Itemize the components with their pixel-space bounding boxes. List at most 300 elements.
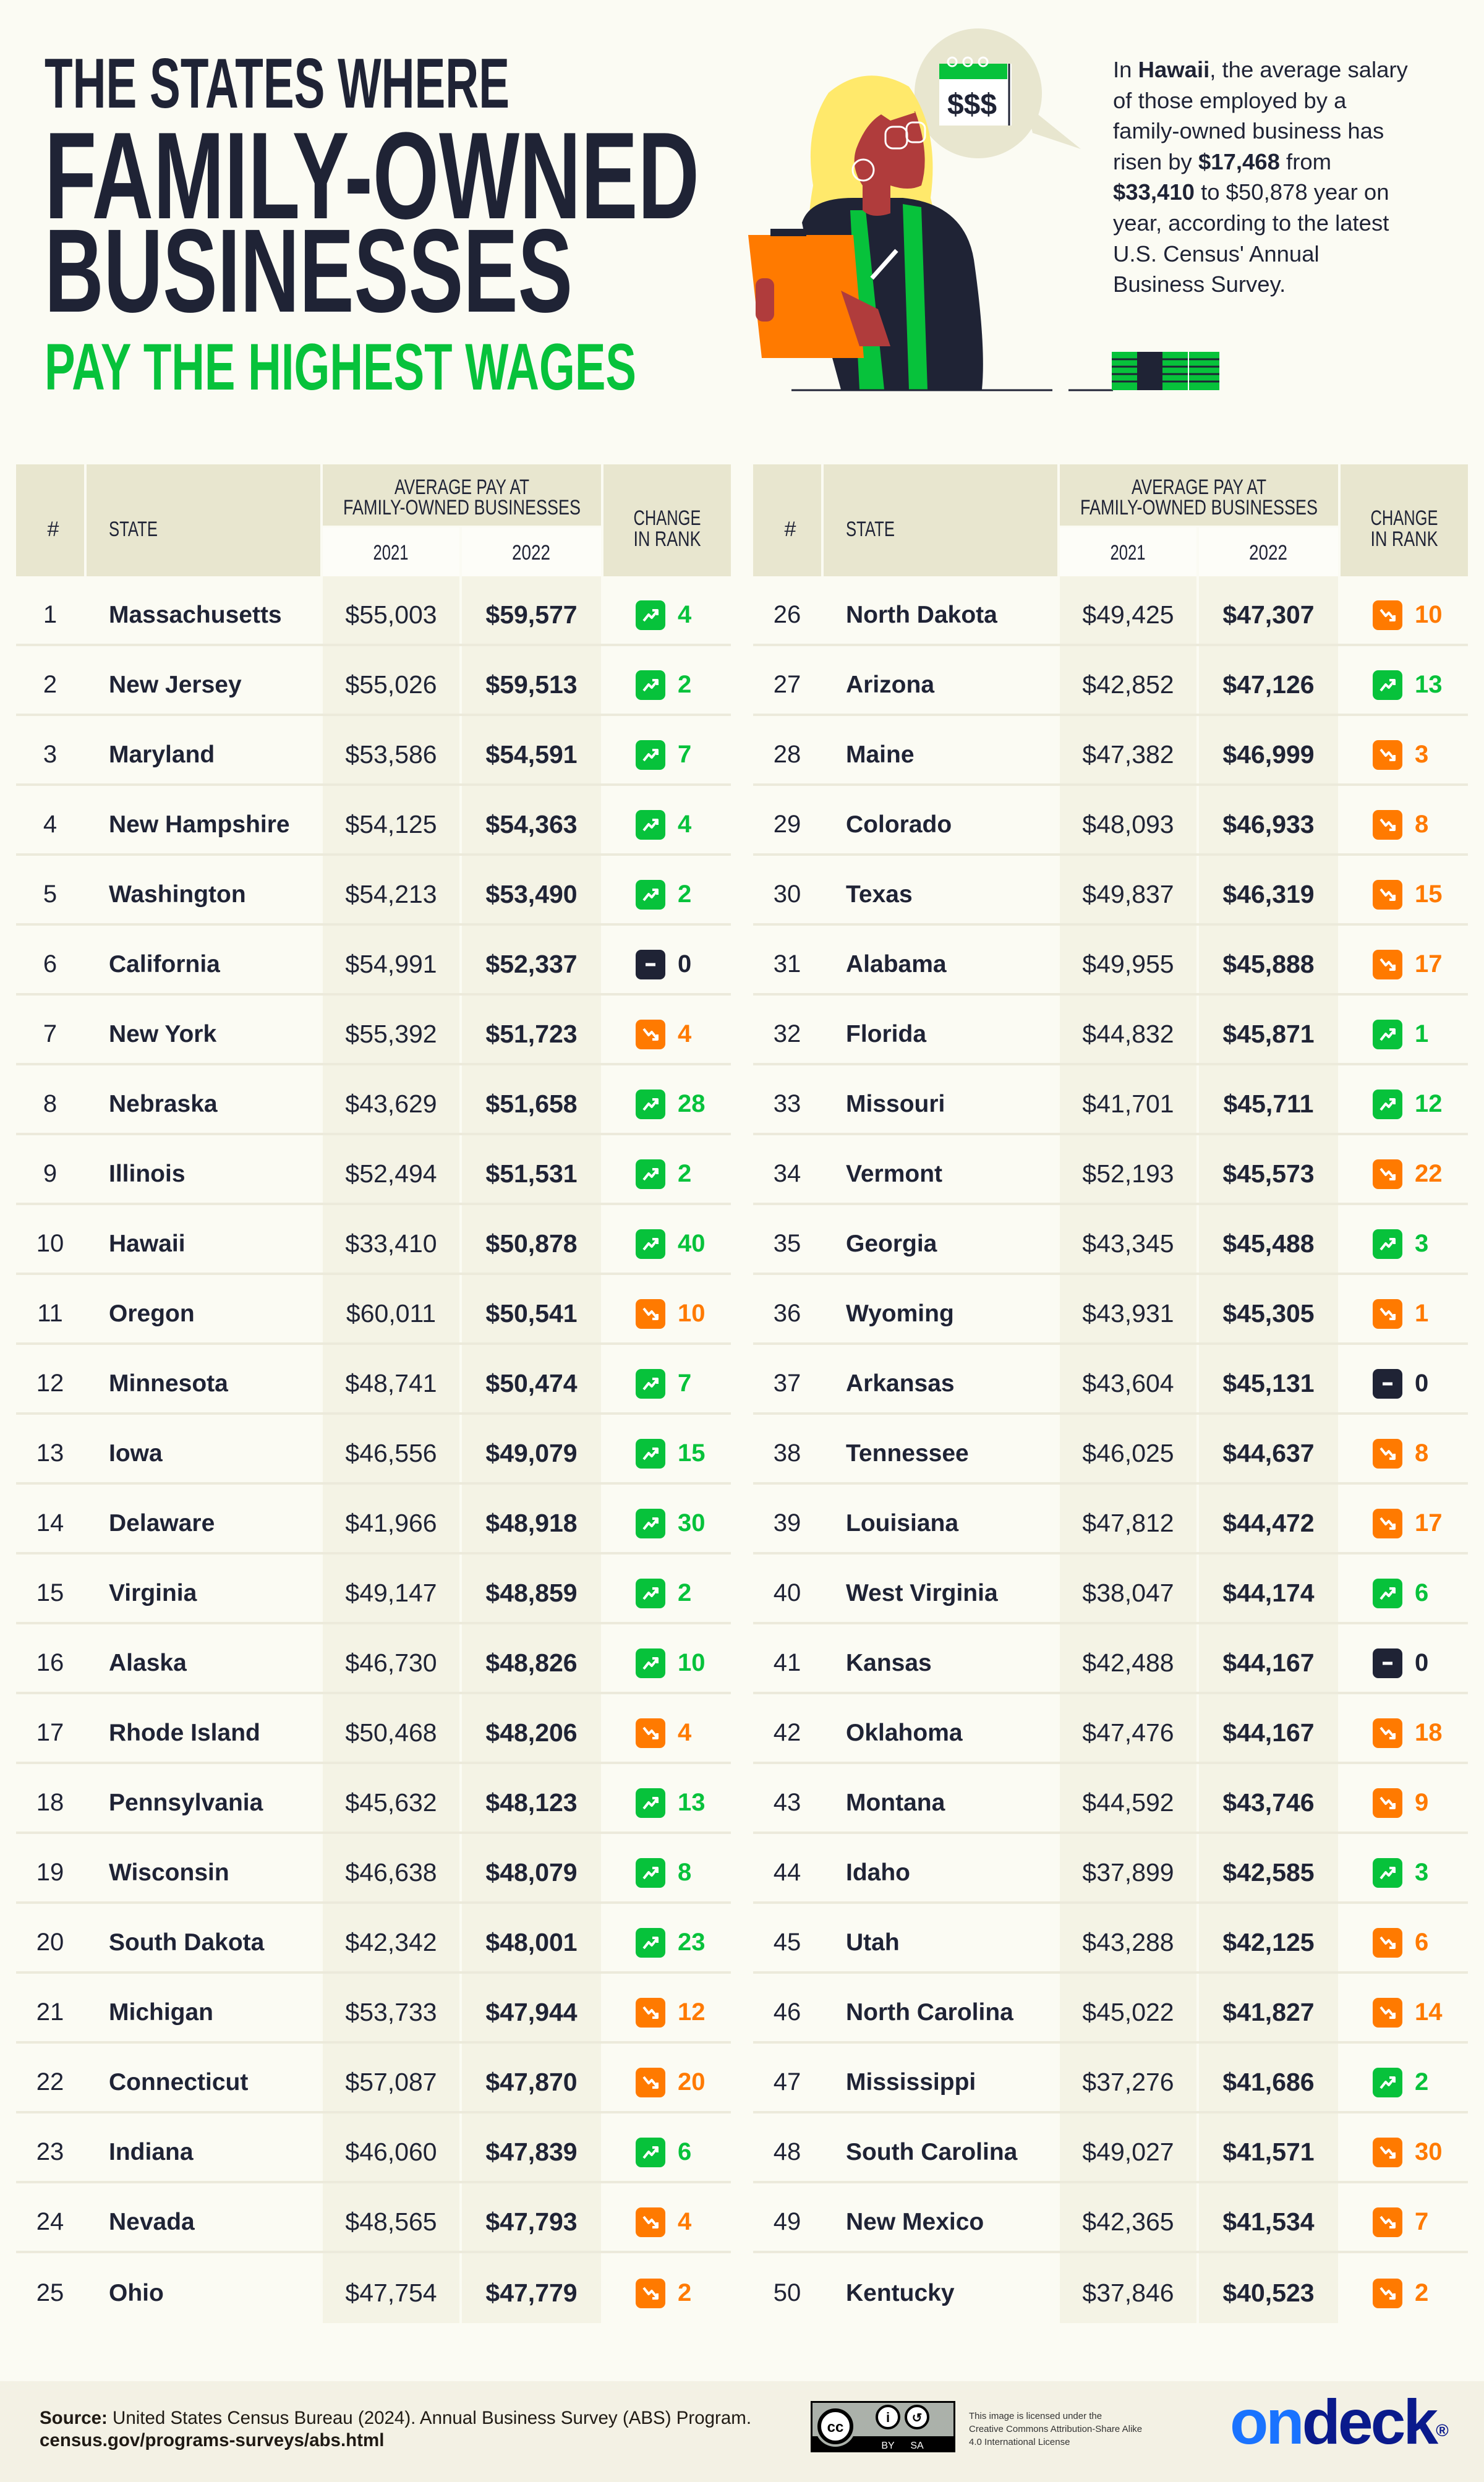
row: Arkansas	[753, 1345, 1468, 1415]
icon: CC BY-SA badge	[811, 2401, 955, 2452]
row: New Jersey: $55,026	[345, 670, 437, 699]
row: Mississippi	[753, 2044, 1468, 2113]
row: Idaho	[753, 1834, 1468, 1904]
row: New Jersey: 2	[43, 671, 57, 698]
row: Maine: Maine	[846, 741, 915, 768]
row: South Carolina: $41,571	[1222, 2138, 1315, 2166]
row: Delaware: Delaware	[109, 1510, 215, 1536]
row: Nevada: Nevada	[109, 2209, 195, 2235]
row: West Virginia	[753, 1554, 1468, 1624]
woman	[748, 75, 983, 390]
intro text: Hawaii callout: risen by $17,468 from	[1113, 149, 1331, 174]
row: Utah: Utah	[846, 1929, 900, 1955]
row: California	[16, 926, 731, 996]
row: Maine	[753, 716, 1468, 786]
row: Massachusetts: Massachusetts	[109, 601, 282, 628]
row: Georgia: 3	[1415, 1230, 1428, 1257]
row: Washington: $53,490	[485, 880, 578, 908]
row: Iowa: Iowa	[109, 1439, 163, 1467]
row: Alabama: $49,955	[1082, 950, 1174, 978]
row: Rhode Island: 17	[36, 1719, 64, 1746]
row: Vermont: $52,193	[1082, 1159, 1174, 1188]
license text: Creative Commons Attribution-Share Alike	[969, 2424, 1142, 2434]
row: Utah: $43,288	[1082, 1928, 1174, 1956]
row: Ohio: $47,754	[345, 2279, 437, 2307]
row: Tennessee: 38	[774, 1439, 801, 1467]
row: Oklahoma: $47,476	[1082, 1718, 1174, 1747]
row: Georgia: $43,345	[1082, 1229, 1174, 1258]
row: Missouri: 33	[774, 1090, 801, 1117]
table header: STATE	[846, 518, 895, 541]
row: New Mexico	[753, 2183, 1468, 2253]
row: Tennessee	[753, 1415, 1468, 1485]
row: Pennsylvania: $45,632	[345, 1788, 437, 1817]
row: Idaho: $37,899	[1082, 1858, 1174, 1887]
row: Missouri	[753, 1065, 1468, 1135]
row: North Dakota: $47,307	[1222, 600, 1315, 629]
row: Washington: 2	[678, 881, 691, 908]
row: New York: 4	[678, 1020, 691, 1047]
row: Hawaii: 10	[36, 1230, 64, 1257]
row: Wyoming: $43,931	[1082, 1299, 1174, 1328]
row: Oregon	[16, 1275, 731, 1345]
row: South Carolina: 48	[774, 2138, 801, 2165]
row: Nebraska: 8	[43, 1090, 57, 1117]
row: Vermont: 22	[1415, 1160, 1442, 1187]
icon: calendar with dollars	[939, 58, 1012, 126]
row: Virginia	[16, 1554, 731, 1624]
row: Oklahoma	[753, 1694, 1468, 1764]
row: Indiana	[16, 2113, 731, 2183]
intro text: Hawaii callout: In Hawaii, the average salary	[1113, 57, 1408, 82]
row: Colorado: Colorado	[846, 811, 952, 837]
row: Illinois: $52,494	[345, 1159, 437, 1188]
source text	[40, 2408, 751, 2450]
row: Georgia: $45,488	[1222, 1229, 1315, 1258]
row: New Mexico: 7	[1415, 2208, 1428, 2235]
row: Hawaii: $50,878	[485, 1229, 578, 1258]
row: Virginia: 2	[678, 1579, 691, 1606]
license text: This image is licensed under the	[969, 2411, 1102, 2421]
row: Alabama: 31	[774, 950, 801, 978]
row: New York: 7	[43, 1020, 57, 1047]
row: Oregon: 10	[678, 1300, 705, 1327]
row: New Jersey: New Jersey	[109, 672, 242, 697]
table: ranks 26-50	[753, 464, 1468, 2323]
row: Wyoming: $45,305	[1222, 1299, 1315, 1328]
table header: AVERAGE PAY AT	[1132, 476, 1266, 499]
row: Illinois: 9	[43, 1160, 57, 1187]
row: West Virginia: West Virginia	[846, 1579, 998, 1606]
row: Massachusetts: $55,003	[345, 600, 437, 629]
row: New Mexico: $41,534	[1222, 2207, 1315, 2236]
row: South Carolina	[753, 2113, 1468, 2183]
row: Montana: 9	[1415, 1789, 1428, 1816]
row: Florida: 1	[1415, 1020, 1428, 1047]
row: Delaware: 14	[36, 1509, 64, 1537]
row: North Dakota: $49,425	[1082, 600, 1174, 629]
row: Alabama: 17	[1415, 950, 1442, 978]
row: Kansas: $42,488	[1082, 1648, 1174, 1677]
table: ranks 1-25	[16, 464, 731, 2323]
row: South Dakota: 23	[678, 1929, 705, 1956]
row: Pennsylvania	[16, 1764, 731, 1834]
row: Kansas: 41	[774, 1649, 801, 1676]
row: New Mexico: New Mexico	[846, 2209, 984, 2235]
row: New York: New York	[109, 1020, 216, 1047]
row: New Mexico: 49	[774, 2208, 801, 2235]
speech bubble	[915, 28, 1081, 158]
row: Kentucky: Kentucky	[846, 2279, 955, 2306]
row: Oregon: Oregon	[109, 1300, 195, 1327]
row: Nevada: 4	[678, 2208, 691, 2235]
table header: AVERAGE PAY AT	[394, 476, 529, 499]
row: Utah: 6	[1415, 1929, 1428, 1956]
illustration: woman with clipboard and speech bubble	[748, 28, 1113, 391]
row: Arkansas: $45,131	[1222, 1369, 1315, 1397]
row: Alaska: $46,730	[345, 1648, 437, 1677]
row: Arizona	[753, 646, 1468, 716]
row: Alabama: $45,888	[1222, 950, 1315, 978]
row: Montana: $44,592	[1082, 1788, 1174, 1817]
row: Florida	[753, 996, 1468, 1065]
title	[45, 45, 699, 404]
row: Virginia: Virginia	[109, 1579, 197, 1606]
row: Maryland: 7	[678, 741, 691, 768]
row: Delaware	[16, 1485, 731, 1554]
row: Connecticut: 20	[678, 2068, 705, 2096]
row: Montana: 43	[774, 1789, 801, 1816]
row: West Virginia: $38,047	[1082, 1579, 1174, 1607]
row: Vermont: 34	[774, 1160, 801, 1187]
row: Tennessee: Tennessee	[846, 1439, 969, 1467]
row: New Hampshire: New Hampshire	[109, 811, 290, 837]
icon: calendar with dollars: $$$	[947, 88, 997, 121]
row: Nevada	[16, 2183, 731, 2253]
row: Minnesota: 7	[678, 1370, 691, 1397]
table header: 2022	[1249, 541, 1287, 565]
row: Connecticut: 22	[36, 2068, 64, 2096]
row: New Hampshire: 4	[678, 811, 691, 838]
row: Kentucky: 50	[774, 2279, 801, 2306]
row: Alaska: $48,826	[485, 1648, 578, 1677]
row: Virginia: $49,147	[345, 1579, 437, 1607]
row: Delaware: $41,966	[345, 1509, 437, 1537]
row: Nevada: $47,793	[485, 2207, 578, 2236]
row: Michigan: Michigan	[109, 1998, 213, 2026]
table header: IN RANK	[633, 527, 701, 551]
row: Kentucky	[774, 2253, 1428, 2323]
row: Colorado	[753, 786, 1468, 856]
row: New Hampshire: $54,125	[345, 810, 437, 838]
row: Kentucky: $40,523	[1222, 2279, 1315, 2307]
row: Washington: Washington	[109, 881, 246, 908]
row: South Dakota: $48,001	[485, 1928, 578, 1956]
footer	[0, 2381, 1484, 2482]
row: Connecticut: Connecticut	[109, 2069, 248, 2095]
row: South Carolina: 30	[1415, 2138, 1442, 2165]
row: Louisiana: 17	[1415, 1509, 1442, 1537]
row: Louisiana: $47,812	[1082, 1509, 1174, 1537]
row: Kansas: 0	[1415, 1649, 1428, 1676]
row: Maine: 3	[1415, 741, 1428, 768]
row: Pennsylvania: 13	[678, 1789, 705, 1816]
row: Vermont	[753, 1135, 1468, 1205]
row: Minnesota: $48,741	[345, 1369, 437, 1397]
row: North Dakota: 26	[774, 601, 801, 628]
row: Oklahoma: 42	[774, 1719, 801, 1746]
row: Maryland: 3	[43, 741, 57, 768]
row: Indiana: $47,839	[485, 2138, 578, 2166]
row: Wisconsin: 19	[36, 1859, 64, 1886]
row: Wisconsin: Wisconsin	[109, 1859, 229, 1886]
row: North Dakota: North Dakota	[846, 601, 997, 628]
row: Colorado: $48,093	[1082, 810, 1174, 838]
row: Colorado: 8	[1415, 811, 1428, 838]
row: Arkansas: 37	[774, 1370, 801, 1397]
row: Mississippi: $41,686	[1222, 2068, 1315, 2096]
row: Connecticut: $47,870	[485, 2068, 578, 2096]
intro text: Hawaii callout: family-owned business has	[1113, 118, 1384, 143]
row: Michigan: 12	[678, 1998, 705, 2026]
row: Arizona: $47,126	[1222, 670, 1315, 699]
row: Alaska	[16, 1624, 731, 1694]
row: New Hampshire: 4	[43, 811, 57, 838]
row: South Carolina: $49,027	[1082, 2138, 1174, 2166]
row: North Carolina: North Carolina	[846, 1998, 1013, 2026]
row: Kansas: Kansas	[846, 1650, 932, 1676]
license text: 4.0 International License	[969, 2437, 1070, 2447]
row: Rhode Island: $50,468	[345, 1718, 437, 1747]
row: Pennsylvania: $48,123	[485, 1788, 578, 1817]
intro text: Hawaii callout: year, according to the latest	[1113, 210, 1389, 236]
table header: 2021	[1111, 541, 1145, 565]
row: Hawaii: 40	[678, 1230, 705, 1257]
row: Idaho: Idaho	[846, 1859, 910, 1886]
row: Minnesota: Minnesota	[109, 1370, 228, 1396]
icon: CC BY-SA badge: SA	[910, 2441, 924, 2451]
row: Oklahoma: $44,167	[1222, 1718, 1315, 1747]
row: Kentucky: $37,846	[1082, 2279, 1174, 2307]
row: Colorado: 29	[774, 811, 801, 838]
row: Nebraska: Nebraska	[109, 1091, 218, 1117]
row: Massachusetts: $59,577	[485, 600, 578, 629]
row: Arkansas: $43,604	[1082, 1369, 1174, 1397]
row: Maine: $46,999	[1222, 740, 1315, 769]
table header	[753, 464, 1468, 576]
logo: ondeck: ondeck®	[1230, 2387, 1449, 2457]
row: Delaware: 30	[678, 1509, 705, 1537]
row: South Dakota: South Dakota	[109, 1929, 264, 1955]
row: Illinois	[16, 1135, 731, 1205]
row: Illinois: 2	[678, 1160, 691, 1187]
row: Arizona: Arizona	[846, 672, 934, 697]
row: Idaho: $42,585	[1222, 1858, 1315, 1887]
row: Oregon: $60,011	[346, 1299, 436, 1328]
row: Texas: $49,837	[1082, 880, 1174, 908]
table header: 2021	[373, 541, 408, 565]
row: California: $54,991	[345, 950, 437, 978]
row: Missouri: $41,701	[1082, 1090, 1174, 1118]
row: Maine: $47,382	[1082, 740, 1174, 769]
row: South Dakota: $42,342	[345, 1928, 437, 1956]
row: New Jersey: 2	[678, 671, 691, 698]
table body	[753, 576, 1468, 2323]
row: Massachusetts: 1	[43, 601, 57, 628]
row: Georgia: 35	[774, 1230, 801, 1257]
row: Michigan: $47,944	[485, 1998, 578, 2026]
row: New York	[16, 996, 731, 1065]
table header: FAMILY-OWNED BUSINESSES	[343, 496, 581, 519]
table header: FAMILY-OWNED BUSINESSES	[1080, 496, 1318, 519]
row: New Jersey: $59,513	[485, 670, 578, 699]
row: North Carolina: $41,827	[1222, 1998, 1315, 2026]
row: Oregon: 11	[37, 1300, 63, 1327]
row: Nebraska: 28	[678, 1090, 705, 1117]
row: Minnesota	[16, 1345, 731, 1415]
row: Missouri: 12	[1415, 1090, 1442, 1117]
row: Iowa: $46,556	[345, 1439, 437, 1467]
row: Illinois: $51,531	[485, 1159, 578, 1188]
row: Michigan	[16, 1974, 731, 2044]
row: West Virginia: 40	[774, 1579, 801, 1606]
row: Tennessee: 8	[1415, 1439, 1428, 1467]
row: North Dakota	[753, 576, 1468, 646]
row: Utah	[753, 1904, 1468, 1974]
row: North Carolina: $45,022	[1082, 1998, 1174, 2026]
row: Florida: $44,832	[1082, 1020, 1174, 1048]
row: Massachusetts	[16, 576, 731, 646]
icon: money stack	[1112, 352, 1219, 390]
row: Louisiana: 39	[774, 1509, 801, 1537]
row: Nevada: $48,565	[345, 2207, 437, 2236]
row: Texas: 15	[1415, 881, 1442, 908]
row: Arizona: 27	[774, 671, 801, 698]
row: Hawaii	[16, 1205, 731, 1275]
row: Kentucky: 2	[1415, 2279, 1428, 2306]
intro text: Hawaii callout: $33,410 to $50,878 year on	[1113, 179, 1389, 205]
row: Iowa: 15	[678, 1439, 705, 1467]
row: Rhode Island: 4	[678, 1719, 691, 1746]
row: Ohio: 2	[678, 2279, 691, 2306]
row: Oklahoma: Oklahoma	[846, 1719, 963, 1746]
row: Idaho: 44	[774, 1859, 801, 1886]
row: Michigan: 21	[36, 1998, 64, 2026]
row: Oklahoma: 18	[1415, 1719, 1442, 1746]
row: Ohio	[36, 2253, 691, 2323]
row: Minnesota: 12	[36, 1370, 64, 1397]
row: Wisconsin: $48,079	[485, 1858, 578, 1887]
row: Vermont: Vermont	[846, 1160, 942, 1187]
row: Pennsylvania: Pennsylvania	[109, 1789, 263, 1815]
row: Utah: $42,125	[1222, 1928, 1315, 1956]
intro text: Hawaii callout	[1113, 57, 1408, 297]
row: Delaware: $48,918	[485, 1509, 578, 1537]
row: Florida: $45,871	[1222, 1020, 1315, 1048]
row: Alabama	[753, 926, 1468, 996]
row: Nebraska	[16, 1065, 731, 1135]
row: Alaska: 10	[678, 1649, 705, 1676]
row: Mississippi: Mississippi	[846, 2069, 976, 2095]
row: Idaho: 3	[1415, 1859, 1428, 1886]
row: Georgia: Georgia	[846, 1230, 937, 1256]
row: Ohio: Ohio	[109, 2279, 164, 2306]
table header: IN RANK	[1370, 527, 1438, 551]
intro text: Hawaii callout: Business Survey.	[1113, 271, 1286, 297]
row: Montana	[753, 1764, 1468, 1834]
row: North Dakota: 10	[1415, 601, 1442, 628]
row: Louisiana	[753, 1485, 1468, 1554]
row: Nebraska: $43,629	[345, 1090, 437, 1118]
row: Iowa: 13	[36, 1439, 64, 1467]
row: Washington: $54,213	[345, 880, 437, 908]
icon: CC BY-SA badge: cc	[827, 2419, 843, 2436]
row: South Carolina: South Carolina	[846, 2138, 1017, 2165]
row: Virginia: 15	[36, 1579, 64, 1606]
row: Nevada: 24	[36, 2208, 64, 2235]
icon: CC BY-SA badge: BY	[881, 2441, 895, 2451]
table body	[16, 576, 731, 2323]
row: California: California	[109, 951, 220, 977]
row: Utah: 45	[774, 1929, 801, 1956]
table header: #	[48, 518, 59, 541]
row: Virginia: $48,859	[485, 1579, 578, 1607]
icon: CC BY-SA badge: ↺	[912, 2412, 922, 2425]
row: New Jersey	[16, 646, 731, 716]
row: Iowa: $49,079	[485, 1439, 578, 1467]
row: Wyoming: 36	[774, 1300, 801, 1327]
row: Wyoming	[753, 1275, 1468, 1345]
row: North Carolina	[753, 1974, 1468, 2044]
row: Wisconsin: $46,638	[345, 1858, 437, 1887]
row: Florida: Florida	[846, 1020, 926, 1047]
row: Arizona: $42,852	[1082, 670, 1174, 699]
row: Maryland	[16, 716, 731, 786]
row: Vermont: $45,573	[1222, 1159, 1315, 1188]
source text: census.gov/programs-surveys/abs.html	[40, 2430, 384, 2450]
row: Missouri: $45,711	[1224, 1090, 1313, 1118]
row: South Dakota: 20	[36, 1929, 64, 1956]
row: Washington	[16, 856, 731, 926]
row: Indiana: $46,060	[345, 2138, 437, 2166]
row: North Carolina: 46	[774, 1998, 801, 2026]
row: California: 0	[678, 950, 691, 978]
row: Indiana: Indiana	[109, 2138, 194, 2165]
row: California: $52,337	[485, 950, 578, 978]
row: California: 6	[43, 950, 57, 978]
license text	[969, 2411, 1142, 2447]
row: Indiana: 6	[678, 2138, 691, 2165]
row: Louisiana: $44,472	[1222, 1509, 1315, 1537]
row: Alabama: Alabama	[846, 951, 947, 977]
row: Maine: 28	[774, 741, 801, 768]
row: Wisconsin	[16, 1834, 731, 1904]
table header: #	[785, 518, 796, 541]
row: Maryland: $53,586	[345, 740, 437, 769]
row: Hawaii: $33,410	[345, 1229, 437, 1258]
row: New Hampshire: $54,363	[485, 810, 578, 838]
source text: Source: United States Census Bureau (2024). Annual Business Survey (ABS) Program.	[40, 2408, 751, 2428]
row: Colorado: $46,933	[1222, 810, 1315, 838]
row: Maryland: $54,591	[485, 740, 578, 769]
row: Iowa	[16, 1415, 731, 1485]
row: Rhode Island: $48,206	[485, 1718, 578, 1747]
row: Hawaii: Hawaii	[109, 1230, 186, 1256]
row: Rhode Island: Rhode Island	[109, 1719, 260, 1746]
row: West Virginia: 6	[1415, 1579, 1428, 1606]
row: Connecticut	[16, 2044, 731, 2113]
table header: 2022	[512, 541, 550, 565]
